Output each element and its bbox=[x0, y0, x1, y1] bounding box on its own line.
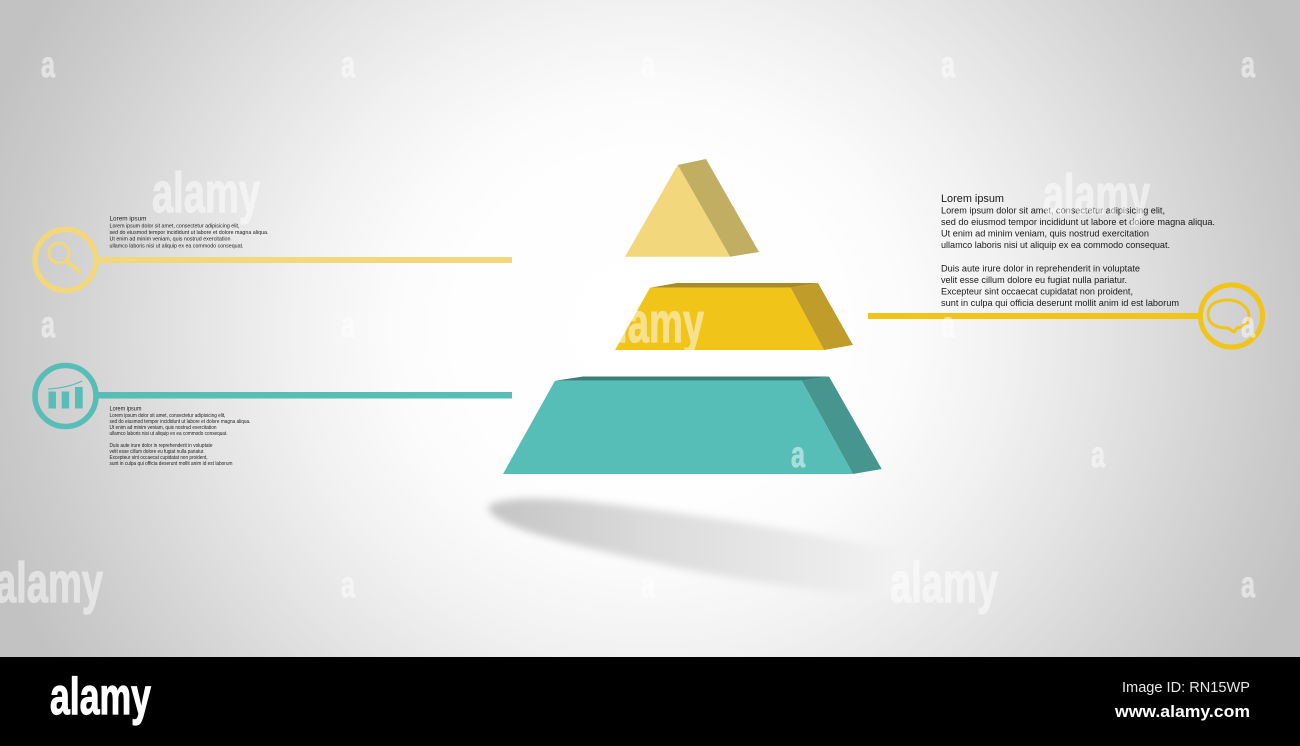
icon: speech bubble bbox=[1200, 285, 1262, 347]
text block: lower-left: velit esse cillum dolore eu fugiat nulla pariatur. bbox=[110, 449, 205, 455]
text block: lower-left: sunt in culpa qui officia deserunt mollit anim id est laborum bbox=[110, 461, 233, 467]
watermarks: alamy bbox=[890, 551, 998, 615]
watermarks: alamy bbox=[1043, 163, 1150, 227]
icon: bar chart bbox=[35, 366, 96, 426]
watermarks: alamy bbox=[596, 291, 704, 355]
image ID: Image ID: RN15WP bbox=[1122, 679, 1250, 696]
watermarks: a bbox=[41, 304, 55, 345]
connector line teal bbox=[98, 392, 512, 398]
text block: right: Lorem ipsum bbox=[941, 193, 1004, 205]
text block: right: velit esse cillum dolore eu fugiat nulla pariatur. bbox=[941, 275, 1127, 286]
callout: right yellow item bbox=[868, 193, 1262, 347]
text block: top-left: sed do eiusmod tempor incididunt ut labore et dolore magna aliqua. bbox=[110, 230, 269, 236]
watermarks: a bbox=[941, 44, 955, 85]
bottom pyramid segment bbox=[503, 376, 882, 474]
text block: lower-left: ullamco laboris nisi ut aliquip ex ea commodo consequat. bbox=[110, 431, 228, 437]
text block: lower-left: Excepteur sint occaecat cupidatat non proident, bbox=[110, 455, 208, 461]
text block: right: sed do eiusmod tempor incididunt ut labore et dolore magna aliqua. bbox=[941, 217, 1215, 228]
watermarks: a bbox=[1241, 564, 1255, 605]
text block: right: Excepteur sint occaecat cupidatat non proident, bbox=[941, 286, 1133, 298]
text block: top-left bbox=[110, 216, 269, 250]
middle pyramid segment bbox=[615, 283, 853, 350]
pyramid shadow bbox=[488, 498, 909, 596]
text block: right: sunt in culpa qui officia deserunt mollit anim id est laborum bbox=[941, 298, 1179, 309]
text block: right bbox=[941, 193, 1215, 309]
callout: top-left yellow item bbox=[35, 216, 512, 290]
text block: lower-left: Lorem ipsum dolor sit amet, consectetur adipisicing elit, bbox=[110, 413, 226, 419]
connector line gold bbox=[868, 313, 1200, 319]
watermarks: a bbox=[641, 564, 655, 605]
watermarks: a bbox=[41, 44, 55, 85]
text block: lower-left bbox=[110, 406, 251, 467]
watermarks: a bbox=[341, 44, 355, 85]
watermarks: a bbox=[791, 434, 805, 475]
callout: left teal item bbox=[35, 366, 512, 467]
watermarks: a bbox=[1241, 304, 1255, 345]
text block: lower-left: Ut enim ad minim veniam, quis nostrud exercitation bbox=[110, 425, 216, 431]
text block: right: Lorem ipsum dolor sit amet, consectetur adipisicing elit, bbox=[941, 206, 1165, 216]
icon: magnifier bbox=[35, 230, 96, 290]
connector line yellow bbox=[98, 257, 512, 263]
footer logo: alamy bbox=[50, 668, 151, 726]
website: www.alamy.com bbox=[1114, 702, 1250, 721]
watermarks: a bbox=[641, 44, 655, 85]
text block: top-left: Lorem ipsum bbox=[110, 216, 146, 222]
footer bar bbox=[0, 657, 1300, 746]
pyramid bbox=[503, 159, 882, 474]
text block: top-left: ullamco laboris nisi ut aliquip ex ea commodo consequat. bbox=[110, 244, 244, 250]
text block: top-left: Lorem ipsum dolor sit amet, consectetur adipisicing elit, bbox=[110, 224, 240, 230]
text block: top-left: Ut enim ad minim veniam, quis nostrud exercitation bbox=[110, 236, 230, 242]
text block: lower-left: sed do eiusmod tempor incididunt ut labore et dolore magna aliqua. bbox=[110, 419, 251, 425]
watermarks: a bbox=[941, 304, 955, 345]
watermarks: a bbox=[1091, 434, 1105, 475]
watermarks: a bbox=[341, 304, 355, 345]
text block: right: Ut enim ad minim veniam, quis nostrud exercitation bbox=[941, 228, 1149, 240]
top pyramid segment bbox=[625, 159, 759, 257]
watermarks: a bbox=[1241, 44, 1255, 85]
text block: right: Duis aute irure dolor in reprehenderit in voluptate bbox=[941, 264, 1140, 274]
watermarks: a bbox=[341, 564, 355, 605]
text block: lower-left: Lorem ipsum bbox=[110, 406, 142, 412]
text block: right: ullamco laboris nisi ut aliquip ex ea commodo consequat. bbox=[941, 240, 1170, 251]
text block: lower-left: Duis aute irure dolor in reprehenderit in voluptate bbox=[110, 443, 212, 449]
watermarks bbox=[0, 44, 1255, 615]
watermarks: alamy bbox=[152, 161, 260, 225]
